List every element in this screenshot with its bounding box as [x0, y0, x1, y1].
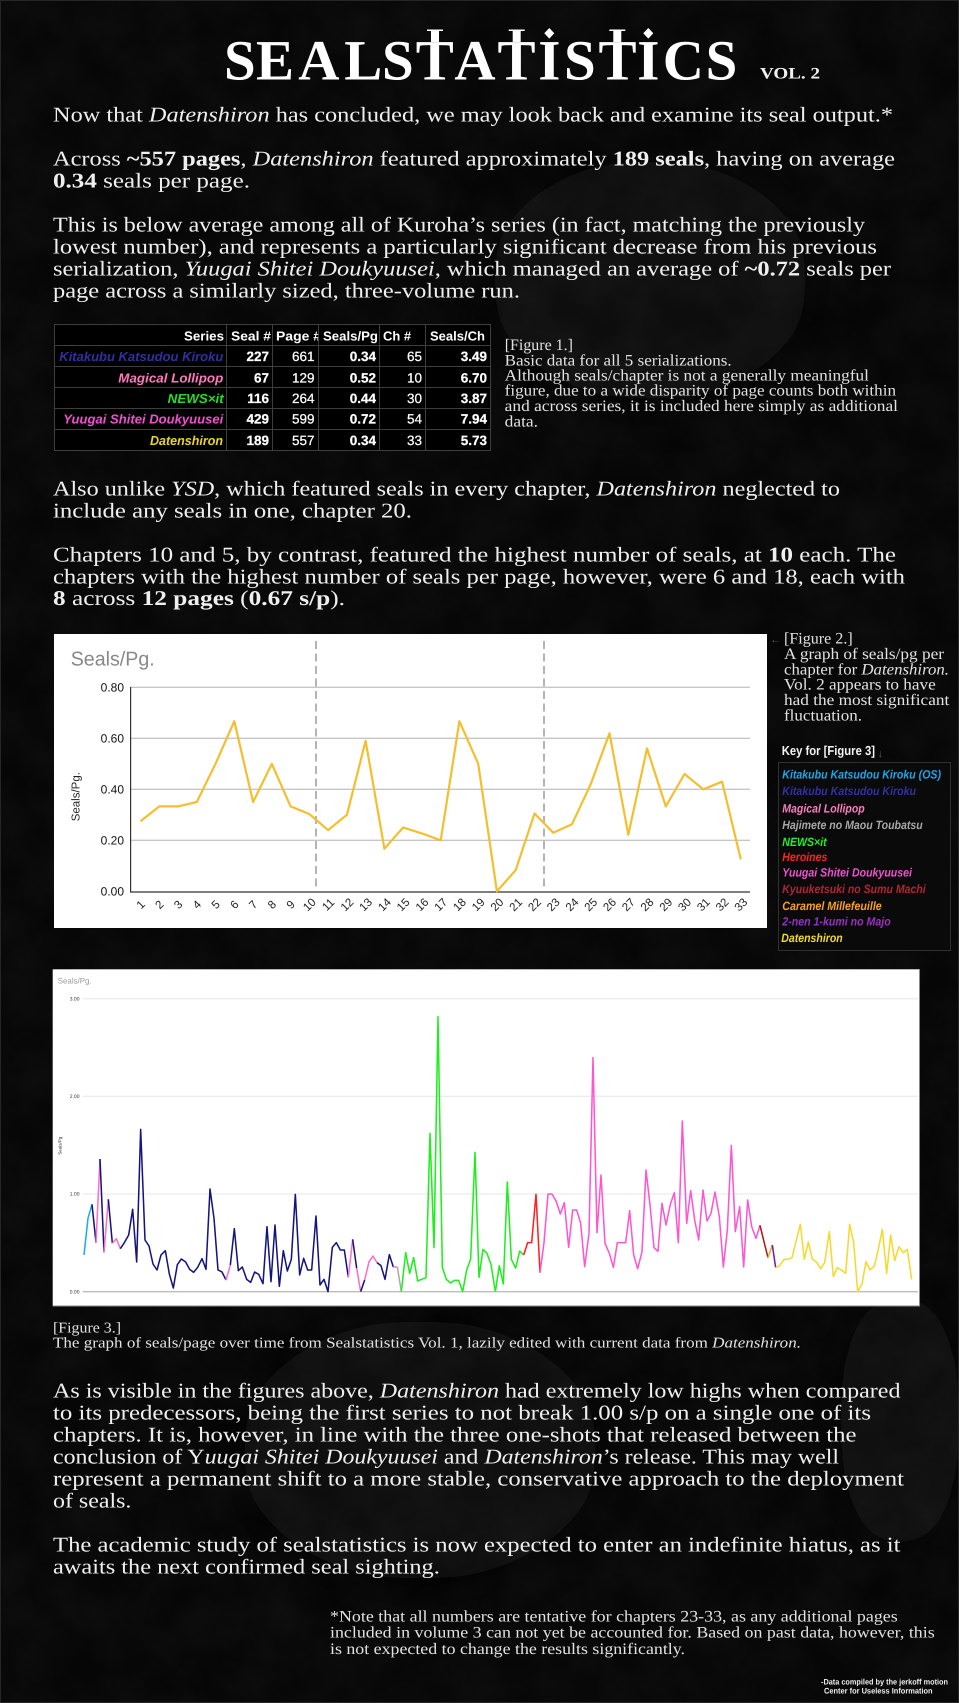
figure 2 caption: [784, 630, 950, 724]
intro text block: Across ~557 pages , Datenshiron featured approximately 189 seals , having on average: [53, 147, 895, 171]
x axis labels: 19: [470, 896, 488, 914]
middle text block: Chapters 10 and 5, by contrast, featured the highest number of seals, at 10 each. The: [53, 543, 896, 567]
conclusion paragraph: chapters. It is, however, in line with the three one-shots that released between the: [53, 1422, 857, 1446]
x axis labels: 21: [508, 896, 525, 914]
intro text block: This is below average among all of Kuroha’s series (in fact, matching the previously: [53, 213, 866, 237]
chart: figure 3 seals per page over time: [53, 969, 920, 1306]
table row: Kitakubu Katsudou Kiroku: [59, 349, 487, 364]
figure 1 caption: figure, due to a wide disparity of page counts both within: [505, 383, 896, 400]
legend: key for figure 3: Kyuuketsuki no Sumu Machi: [782, 882, 926, 896]
footnote: *Note that all numbers are tentative for chapters 23-33, as any additional pages: [330, 1609, 898, 1626]
y axis labels: 0.80: [101, 680, 124, 694]
x axis labels: 11: [320, 897, 337, 914]
intro text block: serialization, Yuugai Shitei Doukyuusei , which managed an average of ~0.72 seals per: [53, 257, 891, 281]
middle text block: [53, 477, 906, 610]
y axis title: Seals/Pg: [58, 1136, 62, 1155]
figure 2 caption: Vol. 2 appears to have: [784, 677, 936, 694]
table row: Yuugai Shitei Doukyuusei: 54: [407, 412, 422, 427]
x axis labels: 29: [658, 896, 675, 914]
table row: Kitakubu Katsudou Kiroku: 3.49: [461, 349, 487, 364]
table row: Kitakubu Katsudou Kiroku: 0.34: [350, 349, 376, 364]
x axis labels: 27: [620, 896, 638, 914]
table row: Yuugai Shitei Doukyuusei: 7.94: [461, 412, 487, 427]
x axis labels: 1: [135, 899, 148, 912]
table row: Datenshiron: Datenshiron: [150, 433, 223, 448]
x axis labels: 14: [376, 896, 394, 914]
table row: NEWS×it: 0.44: [350, 391, 376, 406]
y axis labels: [70, 996, 80, 1295]
table row: NEWS×it: 3.87: [461, 391, 487, 406]
arrow: pointing down to figure 3: ↓: [878, 748, 883, 760]
y axis labels: 0.40: [101, 782, 124, 796]
table header: Ch #: [383, 328, 412, 343]
key heading: Key for [Figure 3]: [782, 743, 875, 758]
x axis labels: 12: [339, 896, 356, 914]
x axis labels: 3: [172, 899, 185, 912]
legend: key for figure 3: Heroines: [782, 850, 828, 864]
footnote: is not expected to change the results significantly.: [330, 1641, 685, 1658]
table row: Kitakubu Katsudou Kiroku: 65: [407, 349, 422, 364]
table row: Kitakubu Katsudou Kiroku: Kitakubu Katsudou Kiroku: [59, 349, 223, 364]
x axis labels: 5: [210, 899, 223, 912]
table header: [184, 324, 485, 346]
legend: key for figure 3: [778, 762, 950, 950]
chart: figure 2 seals per page by chapter: [54, 634, 767, 928]
credits: -Data compiled by the jerkoff motion: [821, 1677, 948, 1686]
table row: Magical Lollipop: Magical Lollipop: [118, 370, 223, 385]
figure 1 caption: Basic data for all 5 serializations.: [505, 352, 732, 369]
conclusion paragraph: to its predecessors, being the first series to not break 1.00 s/p on a single one of its: [53, 1400, 871, 1424]
closing paragraph: [53, 1532, 901, 1578]
table row: Kitakubu Katsudou Kiroku: 227: [246, 349, 269, 364]
x axis labels: 2: [153, 899, 167, 912]
x axis labels: 25: [583, 896, 600, 914]
figure 3 caption: The graph of seals/page over time from Sealstatistics Vol. 1, lazily edited with current data from Datenshiron.: [53, 1336, 801, 1352]
figure 1 caption: data.: [505, 413, 538, 430]
x axis labels: 13: [358, 896, 375, 914]
x axis labels: [135, 896, 750, 914]
legend: key for figure 3: 2-nen 1-kumi no Majo: [781, 914, 891, 928]
data line: [140, 721, 741, 891]
table row: Datenshiron: 5.73: [461, 433, 487, 448]
middle text block: chapters with the highest number of seals per page, however, were 6 and 18, each with: [53, 564, 906, 588]
x axis labels: 22: [526, 896, 544, 914]
x axis labels: 32: [714, 896, 732, 914]
table row: Magical Lollipop: 6.70: [461, 370, 487, 385]
table row: Magical Lollipop: [118, 370, 487, 385]
x axis labels: 26: [601, 896, 619, 914]
legend: key for figure 3: Magical Lollipop: [782, 801, 865, 815]
x axis labels: 18: [451, 896, 469, 914]
table row: Magical Lollipop: 0.52: [350, 370, 376, 385]
x axis labels: 23: [545, 896, 563, 914]
table row: Yuugai Shitei Doukyuusei: [63, 412, 487, 427]
conclusion paragraph: represent a permanent shift to a more stable, conservative approach to the deployment: [53, 1466, 904, 1490]
figure 1 caption: [505, 337, 899, 430]
credits: Center for Useless Information: [824, 1686, 933, 1695]
table header: Seals/Pg: [323, 328, 378, 343]
y axis labels: 0.20: [101, 834, 124, 848]
middle text block: 8 across 12 pages (0.67 s/p ).: [53, 586, 345, 610]
intro text block: [53, 103, 895, 303]
x axis labels: 33: [733, 896, 750, 914]
closing paragraph: awaits the next confirmed seal sighting.: [53, 1554, 440, 1578]
figure 1 caption: and across series, it is included here simply as additional: [505, 398, 899, 415]
data line: later series: [495, 1058, 912, 1292]
figure 3 caption: [Figure 3.]: [53, 1321, 121, 1337]
x axis labels: 9: [285, 899, 298, 912]
x axis labels: 31: [695, 896, 713, 914]
figure 3 caption: [53, 1321, 801, 1352]
y axis labels: 0.60: [101, 732, 124, 746]
intro text block: Now that Datenshiron has concluded, we may look back and examine its seal output.*: [53, 103, 893, 127]
x axis labels: 17: [433, 896, 450, 914]
footnote: included in volume 3 can not yet be accounted for. Based on past data, however, this: [330, 1625, 935, 1642]
table row: NEWS×it: 30: [407, 391, 422, 406]
table row: NEWS×it: 116: [247, 391, 269, 406]
table row: NEWS×it: [168, 391, 487, 406]
table row: Magical Lollipop: 129: [292, 370, 314, 385]
table header: Seals/Ch: [430, 328, 485, 343]
table row: Datenshiron: 33: [407, 433, 422, 448]
table row: Yuugai Shitei Doukyuusei: 599: [292, 412, 314, 427]
table row: Yuugai Shitei Doukyuusei: Yuugai Shitei Doukyuusei: [63, 412, 224, 427]
x axis labels: 16: [414, 896, 431, 914]
footnote: [330, 1609, 935, 1658]
legend: key for figure 3: Hajimete no Maou Toubatsu: [782, 818, 923, 832]
figure 2 caption: had the most significant: [784, 692, 950, 709]
y axis title: Seals/Pg.: [70, 772, 82, 821]
legend: key for figure 3: Yuugai Shitei Doukyuusei: [782, 865, 913, 879]
figure 2 caption: fluctuation.: [784, 707, 862, 724]
figure 1 caption: [Figure 1.]: [505, 337, 573, 354]
arrow: pointing left to figure 2: ←: [770, 634, 781, 646]
volume label: VOL. 2: [760, 66, 820, 83]
legend: key for figure 3: Caramel Millefeuille: [782, 899, 882, 913]
table row: Datenshiron: 557: [292, 433, 314, 448]
legend: key for figure 3: NEWS×it: [782, 835, 828, 849]
y axis labels: 0.00: [101, 884, 124, 898]
y axis labels: 2.00: [70, 1094, 80, 1100]
y axis labels: 3.00: [70, 996, 80, 1002]
intro text block: 0.34 seals per page.: [53, 169, 250, 193]
y axis labels: 0.00: [70, 1289, 80, 1295]
table header: Series: [184, 328, 224, 343]
conclusion paragraph: of seals.: [53, 1488, 131, 1512]
x axis labels: 6: [228, 899, 242, 912]
x axis labels: 30: [676, 896, 694, 914]
table header: Seal #: [231, 328, 272, 343]
conclusion paragraph: [53, 1378, 904, 1512]
figure 2 caption: [Figure 2.]: [784, 630, 853, 647]
legend: key for figure 3: Kitakubu Katsudou Kiroku: [782, 784, 917, 798]
legend: key for figure 3: Datenshiron: [781, 931, 843, 945]
table row: Yuugai Shitei Doukyuusei: 429: [246, 412, 269, 427]
figure 2 caption: A graph of seals/pg per: [784, 646, 945, 663]
x axis labels: 28: [639, 896, 656, 914]
table row: Datenshiron: 189: [246, 433, 269, 448]
data line: early series: [84, 1017, 495, 1292]
middle text block: Also unlike YSD , which featured seals in every chapter, Datenshiron neglected to: [53, 477, 840, 501]
table row: Datenshiron: 0.34: [350, 433, 376, 448]
table row: NEWS×it: NEWS×it: [168, 391, 224, 406]
table row: Magical Lollipop: 10: [407, 370, 422, 385]
intro text block: page across a similarly sized, three-volume run.: [53, 279, 520, 303]
x axis labels: 4: [191, 898, 204, 912]
chart title: Seals/Pg.: [58, 976, 92, 985]
table row: Kitakubu Katsudou Kiroku: 661: [292, 349, 314, 364]
table: figure 1: [54, 324, 490, 450]
x axis labels: 15: [395, 896, 413, 914]
table row: NEWS×it: 264: [292, 391, 315, 406]
table header: Page #: [276, 328, 322, 343]
x axis labels: 8: [266, 899, 279, 912]
table row: Yuugai Shitei Doukyuusei: 0.72: [350, 412, 376, 427]
table row: Magical Lollipop: 67: [254, 370, 269, 385]
conclusion paragraph: conclusion of Y uugai Shitei Doukyuusei and Datenshiron ’s release. This may well: [53, 1444, 839, 1468]
chart title: Seals/Pg.: [71, 649, 155, 671]
conclusion paragraph: As is visible in the figures above, Datenshiron had extremely low highs when compared: [53, 1378, 901, 1402]
title: SEALSTATISTICS: [224, 29, 737, 92]
closing paragraph: The academic study of sealstatistics is now expected to enter an indefinite hiatus, as it: [53, 1532, 901, 1556]
middle text block: include any seals in one, chapter 20.: [53, 498, 412, 522]
y axis labels: 1.00: [70, 1192, 80, 1198]
x axis labels: 24: [564, 896, 582, 914]
x axis labels: 7: [247, 899, 260, 912]
credits: [821, 1677, 948, 1695]
figure 1 caption: Although seals/chapter is not a generally meaningful: [505, 367, 870, 384]
x axis labels: 20: [489, 896, 506, 914]
y axis labels: [101, 680, 124, 898]
table row: Datenshiron: [150, 433, 487, 448]
legend: key for figure 3: Kitakubu Katsudou Kiroku (OS): [782, 767, 941, 781]
intro text block: lowest number), and represents a particularly significant decrease from his previous: [53, 235, 877, 259]
figure 2 caption: chapter for Datenshiron.: [784, 661, 949, 678]
x axis labels: 10: [301, 896, 319, 914]
